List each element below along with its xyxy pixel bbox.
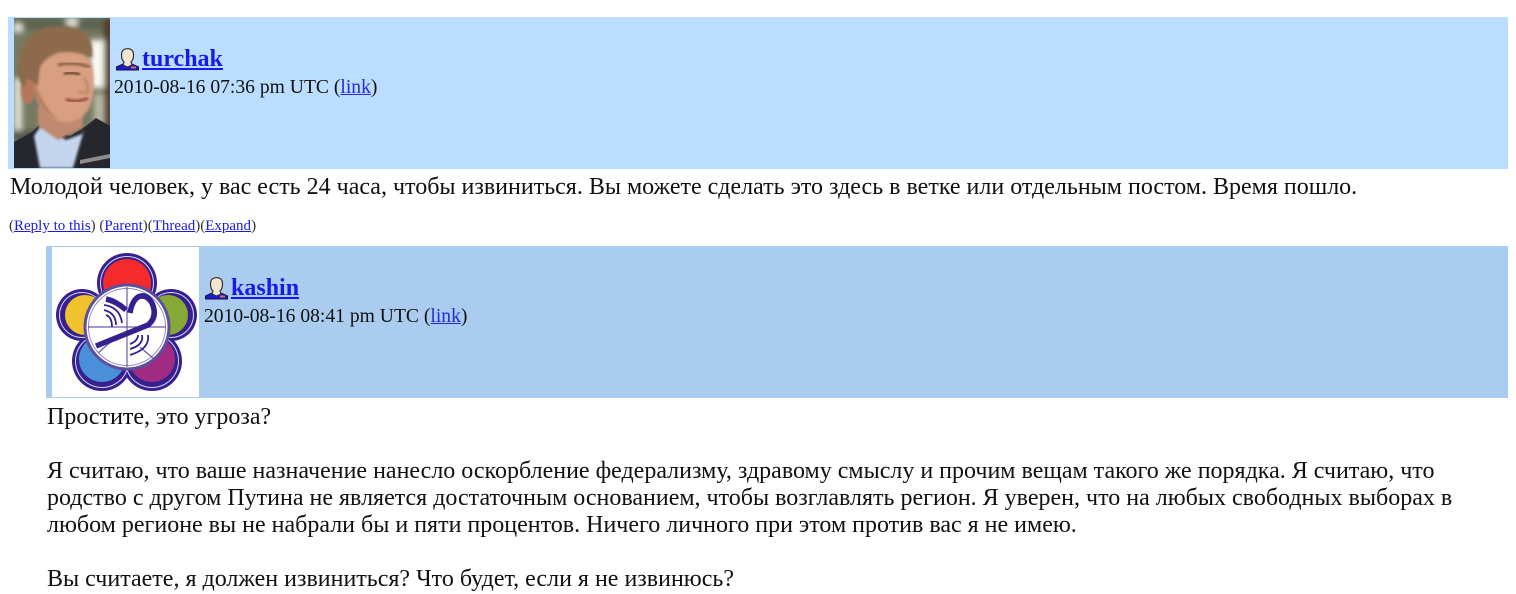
comment action links: (Reply to this) (Parent)(Thread)(Expand) xyxy=(9,218,256,234)
comment text: kashin xyxy=(47,404,1452,592)
comment text: turchak: Молодой человек, у вас есть 24 часа, чтобы извиниться. Вы можете сделать это здесь в ветке или отдельным постом. Время пошло. xyxy=(10,174,1357,200)
ear xyxy=(21,76,35,104)
hair xyxy=(18,26,92,88)
avatar: festival flower logo xyxy=(52,247,199,397)
avatar: turchak photo xyxy=(14,18,110,168)
panel: second comment header xyxy=(46,246,1508,398)
comment text: kashin: Вы считаете, я должен извиниться? Что будет, если я не извинюсь? xyxy=(47,566,734,592)
panel: first comment header xyxy=(8,17,1508,169)
timestamp: 2010-08-16 08:41 pm UTC (link) xyxy=(204,306,467,327)
comment text: kashin: Я считаю, что ваше назначение нанесло оскорбление федерализму, здравому смыслу и прочим вещам такого же порядка. Я считаю, что xyxy=(47,458,1434,484)
comment text: kashin: любом регионе вы не набрали бы и пяти процентов. Ничего личного при этом против вас я не имею. xyxy=(47,512,1077,538)
comment text: kashin: родство с другом Путина не является достаточным основанием, чтобы возглавлять регион. Я уверен, что на любых свободных выборах в xyxy=(47,485,1452,511)
neck xyxy=(38,106,84,140)
comment text: kashin: Простите, это угроза? xyxy=(47,404,271,430)
username: kashin: kashin xyxy=(231,275,299,301)
icon: user head xyxy=(116,48,139,70)
username: turchak: turchak xyxy=(142,46,223,72)
face xyxy=(34,50,94,122)
icon: user head xyxy=(205,277,228,300)
suit and shirt xyxy=(14,118,110,168)
shaded cheek xyxy=(33,83,56,120)
timestamp: 2010-08-16 07:36 pm UTC (link) xyxy=(114,77,377,98)
